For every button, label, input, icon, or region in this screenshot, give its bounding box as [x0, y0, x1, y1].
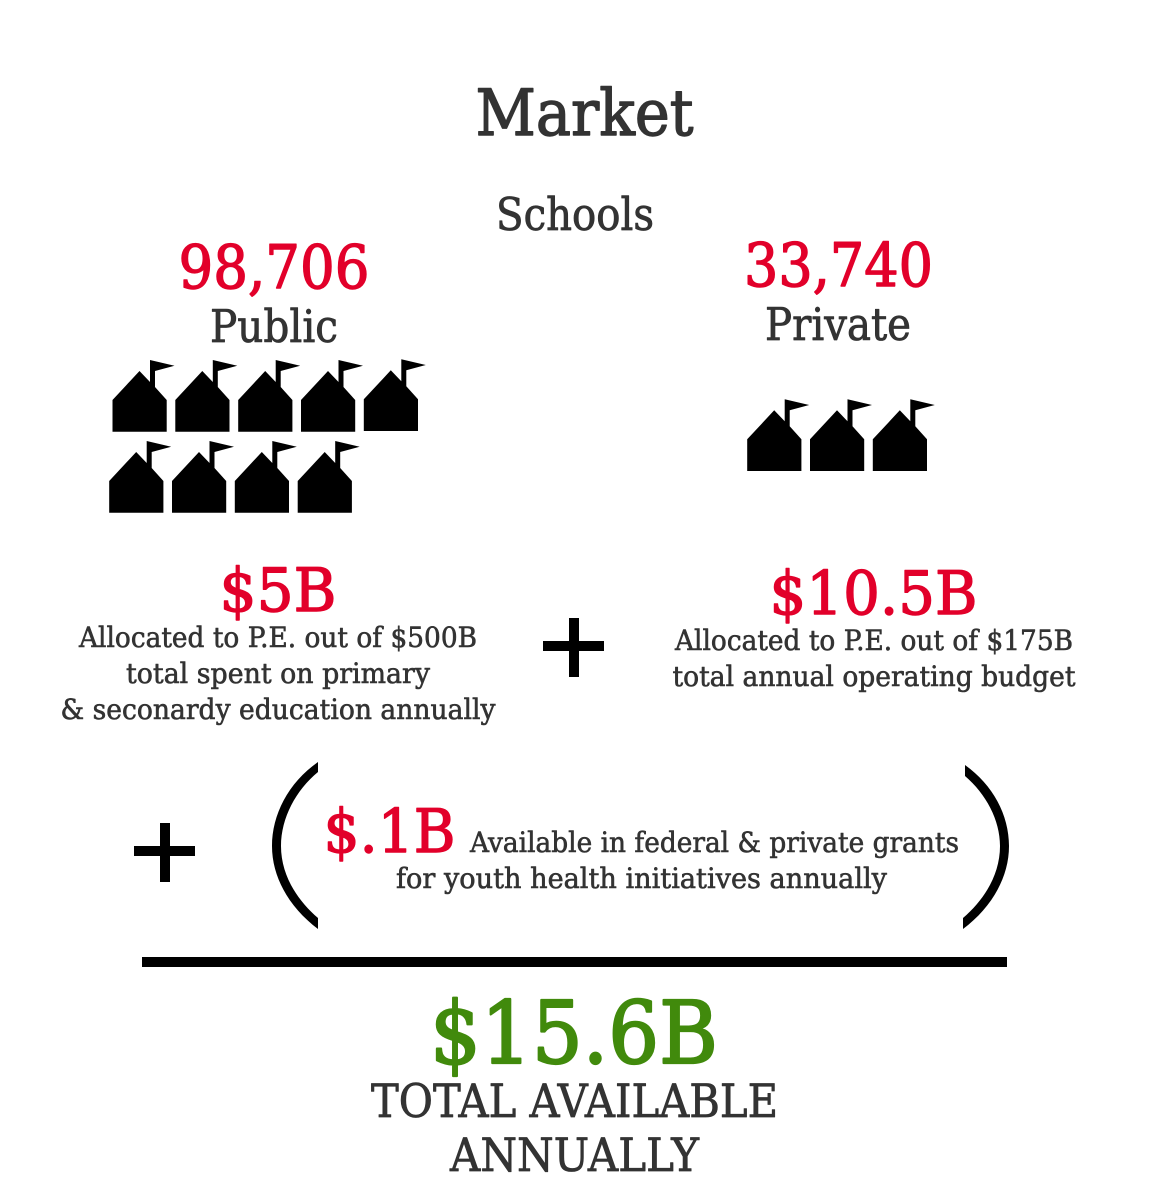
public count: 98,706 — [178, 233, 370, 303]
private label: Private — [765, 298, 911, 351]
sum rule — [142, 957, 1007, 967]
icon: public school houses — [109, 359, 426, 513]
public funding description — [60, 621, 496, 726]
panel: public funding — [60, 556, 496, 726]
grants description — [396, 826, 959, 895]
left parenthesis — [272, 762, 318, 929]
private funding description: total annual operating budget — [672, 660, 1076, 693]
icon: plus between funding — [543, 618, 604, 677]
public amount: $5B — [220, 556, 336, 626]
public funding description: & seconardy education annually — [60, 693, 496, 726]
private count: 33,740 — [744, 231, 933, 301]
public funding description: total spent on primary — [126, 657, 430, 690]
panel: private schools — [744, 231, 935, 471]
total label: ANNUALLY — [449, 1128, 700, 1182]
panel: grants — [272, 762, 1009, 929]
grants description: for youth health initiatives annually — [396, 862, 887, 895]
grants description: Available in federal & private grants — [469, 826, 959, 859]
panel: public schools — [109, 233, 426, 513]
total label — [371, 1074, 778, 1182]
grants amount: $.1B — [324, 797, 456, 867]
private amount: $10.5B — [770, 559, 978, 629]
total amount: $15.6B — [430, 984, 718, 1084]
panel: private funding — [672, 559, 1076, 693]
icon: plus before grants — [134, 823, 195, 882]
private funding description: Allocated to P.E. out of $175B — [674, 624, 1073, 657]
public funding description: Allocated to P.E. out of $500B — [78, 621, 477, 654]
title: Market — [476, 77, 694, 151]
heading: schools: Schools — [496, 188, 654, 241]
private funding description — [672, 624, 1076, 693]
right parenthesis — [963, 765, 1009, 929]
total label: TOTAL AVAILABLE — [371, 1074, 778, 1128]
public label: Public — [210, 300, 338, 353]
icon: private school houses — [747, 399, 935, 471]
